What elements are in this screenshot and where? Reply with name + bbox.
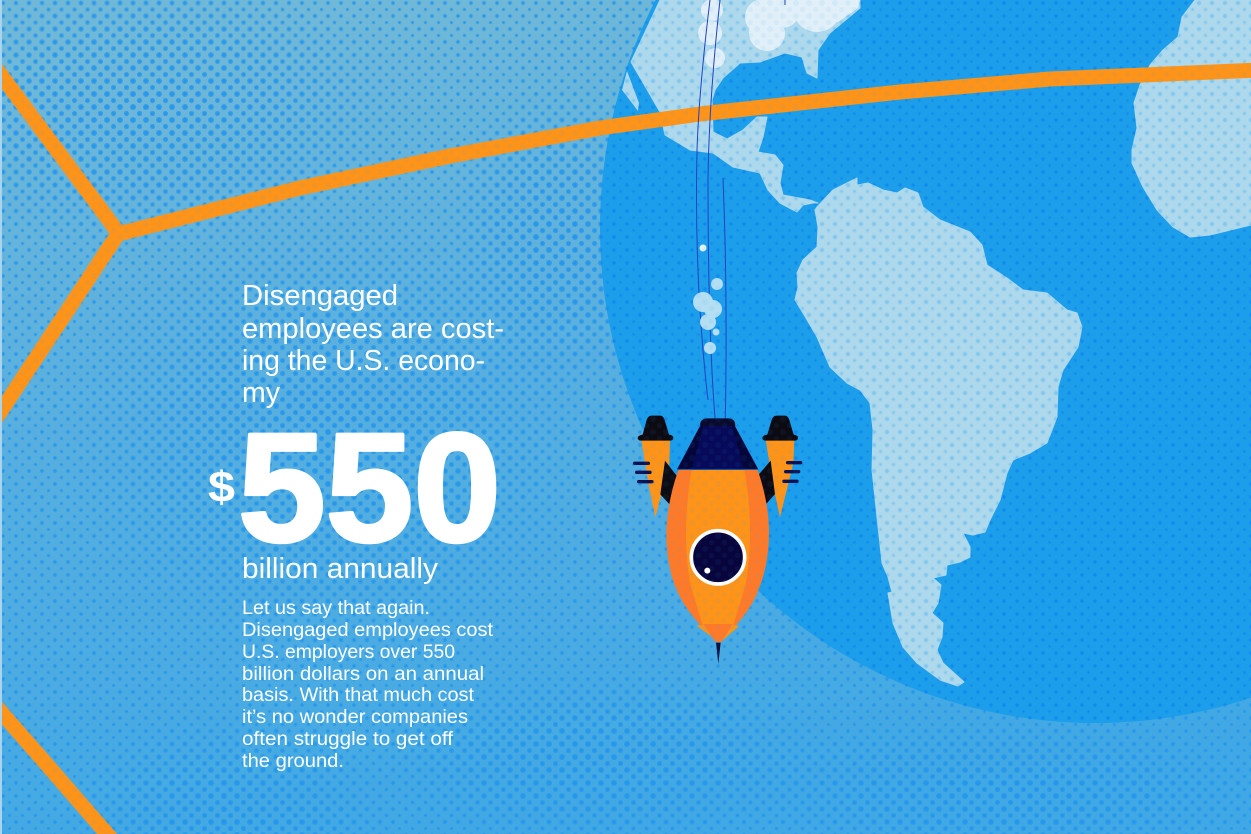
headline: my [242,377,280,409]
land: North America [631,0,860,212]
headline: Disengaged [242,280,398,312]
rocket [635,416,801,664]
body text: it’s no wonder companies [242,706,468,728]
bubbles [693,244,723,354]
headline [242,280,504,409]
right booster [762,416,798,517]
rocket fins [660,461,775,508]
body text: billion dollars on an annual [242,663,484,685]
rocket nose cone [677,418,758,469]
body text: the ground. [242,750,344,772]
land: Baja [622,71,639,111]
big number: $ [208,463,235,512]
land: South America [795,178,1082,686]
rocket tip [716,643,721,664]
headline: employees are cost- [242,313,504,345]
body text: Disengaged employees cost [242,619,494,641]
left booster [638,416,673,517]
clouds [698,0,860,68]
body centre stripe [686,470,750,643]
subheading: billion annually [242,553,439,585]
body text: basis. With that much cost [242,684,475,706]
headline: ing the U.S. econo- [242,345,485,377]
body text: Let us say that again. [242,597,430,619]
rocket body [666,470,769,643]
land: Africa [1132,0,1251,237]
body text [242,597,494,772]
big number: 550 [238,401,501,574]
body text: U.S. employers over 550 [242,641,455,663]
nose panel [703,624,733,642]
left edge strip [0,0,2,834]
globe [600,0,1251,723]
rocket trails [696,0,785,432]
speed marks [635,463,801,482]
body text: often struggle to get off [242,728,454,750]
porthole [691,531,745,584]
land halftone [625,1,1251,686]
